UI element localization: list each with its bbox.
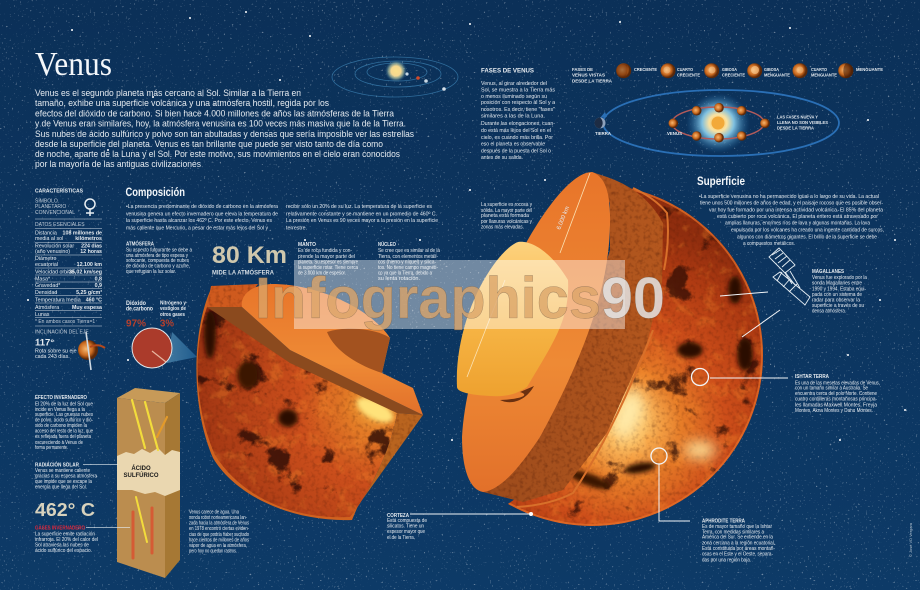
intro text: de noche, aparte de la Luna y el Sol. Por este motivo, sus movimientos en el cielo eran conocidos — [35, 148, 400, 159]
core — [457, 242, 568, 396]
outer rim — [196, 285, 397, 520]
text block: Magallanes: pada con un sistema de — [812, 292, 862, 298]
text block: superficie: está cubierto por roca volcánica. El planeta entero está atravesado por — [717, 214, 878, 220]
panel: phases row: VENUS VISTAS — [572, 72, 605, 78]
text block: superficie: expulsada por los volcanes ha creado una ingente cantidad de surcos, — [731, 227, 884, 233]
section disc — [462, 172, 610, 492]
panel: phases row: MENGUANTE — [811, 72, 837, 78]
intro text: y de Venus eran similares, hoy, la atmósfera venusina es 100 veces más masiva que la de la Tierra. — [35, 118, 406, 129]
text block: agua en Venus: cias de que podría haber sucitado — [189, 532, 249, 538]
panel: características table: 224 días — [81, 244, 102, 250]
panel: phases row: CUARTO — [677, 67, 693, 72]
text block: Aphrodite Terra: América del Sur. Se extiende en la — [702, 535, 773, 541]
text block: atmósfera: sofocante, compuesta de nubes — [126, 258, 189, 264]
text block: composición: terrestre. — [286, 225, 307, 231]
panel: phases row — [572, 63, 883, 84]
atmosphere gases — [126, 300, 197, 368]
text block: atmósfera: que refugian la luz solar. — [126, 269, 176, 275]
panel: características table: cada 243 días. — [35, 354, 70, 360]
panel: características table: 35,02 km/seg — [69, 270, 102, 276]
panel: características table: DATOS ESENCIALES — [35, 222, 85, 228]
intro text: tamaño, exhibe una superficie volcánica y una atmósfera hostil, regida por los — [35, 97, 329, 108]
text block: Ishtar Terra: con un tamaño similar a Australia. Se — [795, 386, 868, 392]
panel: phases row: GIBOSA — [764, 67, 779, 72]
text block: radiación solar: Venus se mantiene caliente — [35, 468, 90, 474]
panel: características table: Velocidad orbital — [35, 270, 74, 276]
panel: características table: Densidad — [35, 290, 57, 296]
atmosphere gases: Dióxido — [126, 301, 146, 307]
text block: gases invernadero: infrarroja. El 20% del calor del — [35, 537, 98, 543]
text block: superficie: a compuestos metálicos. — [743, 241, 795, 247]
panel: características table: CARACTERÍSTICAS — [35, 186, 83, 194]
surface texture — [198, 307, 397, 518]
text block: corteza: el de la Tierra. — [387, 535, 415, 541]
text block: núcleo — [378, 241, 440, 282]
pie chart — [132, 328, 197, 368]
panel: características table: SÍMBOLO — [35, 198, 58, 204]
panel: características table: media al sol — [35, 236, 63, 242]
text block: composición: •La presencia predominante de dióxido de carbono en la atmósfera — [126, 204, 279, 210]
text block: atmósfera: ATMÓSFERA — [126, 240, 154, 248]
text block: núcleo: NÚCLEO — [378, 241, 396, 248]
text block: atmósfera — [126, 240, 192, 275]
panel: fases de Venus text — [481, 68, 555, 161]
panel: phases row: FASES DE — [572, 67, 593, 72]
text block: atmósfera: Su aspecto fulgurante se debe a — [126, 248, 192, 254]
panel: phases row: GIBOSA — [722, 67, 737, 72]
text block: manto: planeta. Su espesor es siempre — [298, 260, 358, 266]
text block: Ishtar Terra: ISHTAR TERRA — [795, 374, 829, 380]
mantle side wall — [353, 413, 423, 513]
panel: fases de Venus text: do está más lejos del Sol en el — [481, 128, 551, 134]
panel: características table: Temperatura media — [35, 298, 81, 304]
text block: composición: relativamente constante y se mantiene en un promedio de 460º C. — [286, 210, 437, 217]
text block: superficie — [699, 194, 884, 247]
panel: características table: Rota sobre su eje — [35, 348, 77, 354]
intro text — [35, 87, 414, 169]
text block: manto: la superficie rotar. Tiene cerca — [298, 265, 358, 271]
text block: agua en Venus: hace cientos de millones de años — [189, 537, 249, 543]
text block: radiación solar: energía que llega del Sol. — [35, 484, 87, 490]
surface — [508, 188, 763, 526]
panel: características table: 12.100 km — [77, 262, 102, 268]
text block: radiación solar — [35, 460, 97, 490]
text block: radiación solar: RADIACIÓN SOLAR — [35, 460, 79, 468]
text block: superficie: tiene unos 500 millones de años de edad, y el paisaje rocoso que es posible obser- — [700, 201, 883, 207]
text block: corteza rocosa: por llanuras volcánicas y — [481, 219, 532, 225]
text block: Ishtar Terra: les llamadas Maxwell Montes, Freyja — [795, 402, 877, 408]
atmosphere gases: Nitrógeno y — [160, 300, 187, 306]
text block: manto: de 3.000 km de espesor. — [298, 270, 346, 276]
text block: Magallanes: 1990 y 1994. Estaba equi- — [812, 286, 866, 292]
panel: phases row: CUARTO — [811, 67, 827, 72]
text block: agua en Venus: en 1978 encontró ciertas eviden- — [189, 526, 249, 532]
orbit diagram: VENUS — [667, 131, 682, 136]
panel: fases de Venus text: cielo, es cuando más brilla. Por — [481, 135, 553, 141]
panel: características table: kilómetros — [75, 236, 102, 242]
callout: 462 C: 462° C — [35, 500, 95, 520]
panel: fases de Venus text: FASES DE VENUS — [481, 68, 535, 74]
label: ácido sulfúrico: SULFÚRICO — [124, 472, 159, 479]
text block: agua en Venus: Venus carece de agua. Una — [189, 510, 239, 516]
orbit diagram: TIERRA — [595, 131, 612, 136]
callout lines on planet — [410, 292, 788, 521]
label: ácido sulfúrico: ÁCIDO — [131, 465, 151, 472]
panel: características table: CONVENCIONAL — [35, 210, 75, 216]
text block: corteza rocosa — [481, 202, 532, 230]
atmosphere gases: vestigios de — [160, 306, 186, 312]
text block: composición: venusina genera un efecto invernadero que eleva la temperatura de — [126, 211, 278, 217]
panel: características table: 12 horas — [80, 249, 102, 255]
panel: características table: Diámetro — [35, 256, 57, 262]
text block: núcleo: Tierra, con elementos metáli- — [378, 254, 438, 260]
panel: características table: Masa* — [35, 276, 50, 282]
text block: manto: MANTO — [298, 242, 316, 248]
intro text: Sus nubes de ácido sulfúrico y polvo son tan abultadas y densas que sería imposible ver las estrellas — [35, 128, 414, 139]
title: Venus — [35, 46, 112, 83]
credit: © José VD Vergara — [908, 522, 913, 557]
text block: Aphrodite Terra: Es de mayor tamaño que la Ishtar — [702, 524, 772, 530]
text block: corteza: espesor mayor que — [387, 529, 425, 535]
text block: efecto invernadero: EFECTO INVERNADERO — [35, 395, 87, 401]
text block: Magallanes — [812, 269, 867, 314]
diagram: right planet — [456, 172, 763, 526]
text block: corteza: CORTEZA — [387, 513, 409, 519]
text block: radiación solar: que impide que se escape la — [35, 479, 92, 485]
panel: características table: Atmósfera — [35, 305, 59, 311]
heading: superficie: Superficie — [697, 176, 745, 188]
text block: corteza rocosa: zonas más elevadas. — [481, 224, 524, 230]
panel: phases row: CRECIENTE — [722, 72, 745, 78]
text block: Aphrodite Terra: APHRODITE TERRA — [702, 518, 745, 524]
text block: núcleo: cos (hierro y níquel) y silica- — [378, 260, 436, 266]
panel: fases de Venus text: similares a las de la Luna. — [481, 114, 545, 120]
atmosphere gases: de carbono — [126, 306, 153, 312]
panel: características table: Muy espesa — [72, 305, 102, 311]
intro text: por la mayoría de las antiguas civilizaciones — [35, 158, 201, 169]
text block: corteza rocosa: planeta está formada — [481, 213, 529, 219]
panel: características table: 5,25 g/cm³ — [76, 290, 102, 296]
text block: Aphrodite Terra: zona cercana a la región ecuatorial. — [702, 540, 775, 546]
text block: agua en Venus — [189, 510, 249, 554]
label: 6.000 km: 6.000 km — [556, 206, 571, 231]
radius lines — [467, 173, 590, 377]
panel: fases de Venus text: Venus, al girar alrededor del — [481, 81, 547, 87]
text block: composición: recibir sólo un 20% de su luz. La temperatura de la superficie es — [286, 204, 432, 210]
panel: fases de Venus text: Sol, se muestra a la Tierra más — [481, 88, 555, 94]
panel: fases de Venus text: o menos iluminado según su — [481, 94, 547, 100]
icon: tilted planet — [78, 332, 105, 370]
text block: efecto invernadero: incide en Venus llega a la — [35, 407, 85, 413]
panel: características table: 117° — [35, 338, 54, 348]
text block: composición: la superficie hasta alcanzar los 462º C. Por este efecto, Venus es — [126, 217, 272, 224]
orbit diagram: DESDE LA TIERRA — [777, 126, 815, 131]
cloud layer — [117, 448, 180, 496]
text block: efecto invernadero — [35, 395, 93, 451]
text block: núcleo: co ya que la Tierra, debido a — [378, 270, 432, 276]
text block: superficie: var hoy fue formado por una intensa actividad volcánica. El 85% del planeta — [709, 207, 884, 213]
text block: agua en Venus: sonda robot norteamericana lan- — [189, 515, 247, 521]
panel: características table: PLANETARIO — [35, 204, 66, 210]
text block: agua en Venus: vapor de agua en la atmósfera, — [189, 543, 247, 549]
text block: Magallanes: MAGALLANES — [812, 269, 844, 275]
text block: Ishtar Terra: Es una de las mesetas elevadas de Venus, — [795, 380, 880, 386]
text block: atmósfera: de dióxido de carbono y azufre, — [126, 264, 190, 270]
text block: corteza: silicatos. Tiene un — [387, 524, 424, 530]
diagram: atmosphere column — [117, 388, 180, 578]
intro text: Venus es el segundo planeta más cercano al Sol. Similar a la Tierra en — [35, 87, 301, 98]
text block: manto — [298, 242, 358, 276]
text block: gases invernadero: La superficie emite radiación — [35, 532, 95, 538]
text block: manto: Es de roca fundida y con- — [298, 248, 352, 254]
watermark: Infographics90 — [255, 266, 665, 331]
text block: superficie: amplias llanuras, enormes ríos de lava y algunas montañas. La lava — [725, 221, 871, 227]
text block: corteza — [387, 513, 427, 541]
text block: composición: La presión en Venus es 90 veces mayor a la presión en la superficie — [286, 218, 438, 224]
panel: características table: Gravedad* — [35, 283, 60, 289]
text block: Magallanes: Venus fue explorado por la — [812, 275, 867, 281]
text block: núcleo: su lenta rotación. — [378, 276, 420, 282]
text block: superficie: •La superficie venusina no ha permanecido igual a lo largo de su vida. La actual — [699, 194, 879, 200]
panel: características table: Revolución solar — [35, 244, 74, 250]
crust rim — [517, 188, 668, 507]
text block: gases invernadero — [35, 526, 98, 554]
text block: núcleo: tos. No tiene campo magnéti- — [378, 265, 438, 271]
solar system diagram — [332, 57, 458, 97]
text block: Ishtar Terra: encuentra cerca del polo Norte. Contiene — [795, 391, 877, 397]
orbit diagram — [594, 90, 839, 156]
text block: gases invernadero: ácido sulfúrico del espacio. — [35, 548, 92, 554]
panel: fases de Venus text: posición con respecto al Sol y a — [481, 100, 555, 106]
text block: gases invernadero: GASES INVERNADERO — [35, 526, 85, 532]
panel: características table: 0,8 — [95, 276, 102, 282]
icon: Magellan probe — [769, 248, 810, 305]
icon: Venus symbol — [85, 199, 95, 216]
panel: fases de Venus text: después de la puesta del Sol o — [481, 148, 551, 154]
text block: efecto invernadero: es reflejada fuera del planeta — [35, 434, 91, 440]
text block: Magallanes: densa atmósfera. — [812, 308, 846, 314]
text block: efecto invernadero: forma permanente. — [35, 445, 68, 451]
panel: características table: Distancia — [35, 230, 57, 236]
panel: fases de Venus text: Durante las elongaciones, cuan- — [481, 121, 555, 127]
panel: características table: 0,9 — [95, 283, 102, 289]
panel: phases row: MENGUANTE — [764, 72, 790, 78]
sun rays — [132, 400, 167, 558]
panel: características table: Lunas — [35, 312, 50, 318]
text block: Ishtar Terra: Montes, Akna Montes y Danu Montes. — [795, 408, 873, 414]
text block: Aphrodite Terra: Está constituida por áreas montañ- — [702, 546, 775, 552]
text block: radiación solar: gracias a su espesa atmósfera — [35, 474, 97, 480]
text block: composición: más caliente que Mercurio, a pesar de estar más lejos del Sol y — [126, 225, 268, 231]
text block: Aphrodite Terra: das por una región baja. — [702, 557, 751, 563]
text block: núcleo: Se cree que es similar al de la — [378, 248, 440, 254]
panel: fases de Venus text: antes de su salida. — [481, 155, 523, 161]
atmosphere gases: 3% — [160, 318, 174, 330]
text block: Aphrodite Terra — [702, 518, 775, 563]
text block: atmósfera: una atmósfera de tipo espesa y — [126, 253, 188, 259]
pointer lines — [83, 465, 130, 528]
panel: fases de Venus text: nosotros. Es decir, tiene "fases" — [481, 107, 555, 113]
crust plate — [242, 284, 423, 415]
mantle band — [207, 307, 423, 415]
panel: phases row: MENGUANTE — [856, 67, 883, 72]
panel: características table: * En ambos casos Tierra=1 — [35, 319, 95, 325]
text block: Magallanes: superficie a través de su — [812, 303, 864, 309]
panel: fases de Venus text: eso el planeta es observable — [481, 142, 545, 148]
panel: características table — [35, 186, 105, 370]
text block: agua en Venus: zada hacia la atmósfera de Venus — [189, 521, 249, 527]
panel: phases row: DESDE LA TIERRA — [572, 78, 613, 84]
plate hollow — [327, 329, 390, 373]
text block: corteza rocosa: sólida. La mayor parte del — [481, 208, 532, 214]
text block: Aphrodite Terra: Terra, con medidas similares a — [702, 529, 764, 535]
panel: características table: ecuatorial — [35, 262, 58, 268]
text block: efecto invernadero: acceso del resto de la luz, que — [35, 428, 93, 434]
diagram: left planet section — [196, 284, 423, 520]
orbit diagram: LLENA NO SON VISIBLES — [777, 120, 828, 125]
text block: Ishtar Terra — [795, 374, 880, 414]
atmosphere gases: otros gases — [160, 312, 185, 318]
intro text: desde la superficie del planeta. Venus es tan brillante que puede ser visto tanto de día como — [35, 138, 383, 149]
text block: gases invernadero: Sol atraviesa las nubes de — [35, 542, 89, 548]
panel: phases row: CRECIENTE — [634, 67, 657, 72]
label: ácido sulfúrico — [124, 465, 159, 479]
text block: corteza rocosa: La superficie es rocosa y — [481, 202, 532, 208]
panel: características table: INCLINACIÓN DEL EJE — [35, 328, 89, 336]
text block: corteza: Está compuesta de — [387, 518, 427, 524]
mantle — [483, 172, 663, 502]
text block: efecto invernadero: El 20% de la luz del Sol que — [35, 402, 93, 408]
atmosphere gases: 97% — [126, 318, 146, 330]
panel: características table: (año venusino) — [35, 249, 70, 255]
panel: características table: 108 millones de — [63, 230, 102, 236]
text block: efecto invernadero: oscureciendo a Venus de — [35, 440, 83, 446]
heading: composición: Composición — [126, 187, 185, 199]
text block: efecto invernadero: xido de carbono impiden la — [35, 423, 87, 429]
text block: Aphrodite Terra: osas en el Este y el Oeste, separa- — [702, 552, 773, 558]
text block: Ishtar Terra: cuatro cordilleras montañosas principa- — [795, 397, 877, 403]
panel: phases row: CRECIENTE — [677, 72, 700, 78]
text block: efecto invernadero: de polvo, ácido sulfúrico y dió- — [35, 418, 93, 424]
text block: Magallanes: radar para observar la — [812, 297, 860, 303]
text block: Magallanes: sonda Magallanes entre — [812, 281, 862, 287]
callout: 80 km: MIDE LA ATMÓSFERA — [212, 268, 275, 276]
text block: composición — [126, 204, 438, 231]
orbit diagram: LAS FASES NUEVA Y — [777, 114, 819, 120]
panel: características table: 460 °C — [86, 298, 102, 304]
callout: 80 km: 80 Km — [212, 242, 287, 269]
text block: efecto invernadero: superficie. Las gruesas nubes — [35, 412, 93, 418]
text block: agua en Venus: pero hoy no quedan rastros. — [189, 548, 237, 554]
text block: superficie: algunos con diámetros gigantes. El brillo de la superficie se debe — [737, 234, 877, 240]
text block: manto: prende la mayor parte del — [298, 254, 355, 260]
intro text: efectos del dióxido de carbono. Si bien hace 4.000 millones de años las atmósferas de la Tierra — [35, 107, 395, 118]
